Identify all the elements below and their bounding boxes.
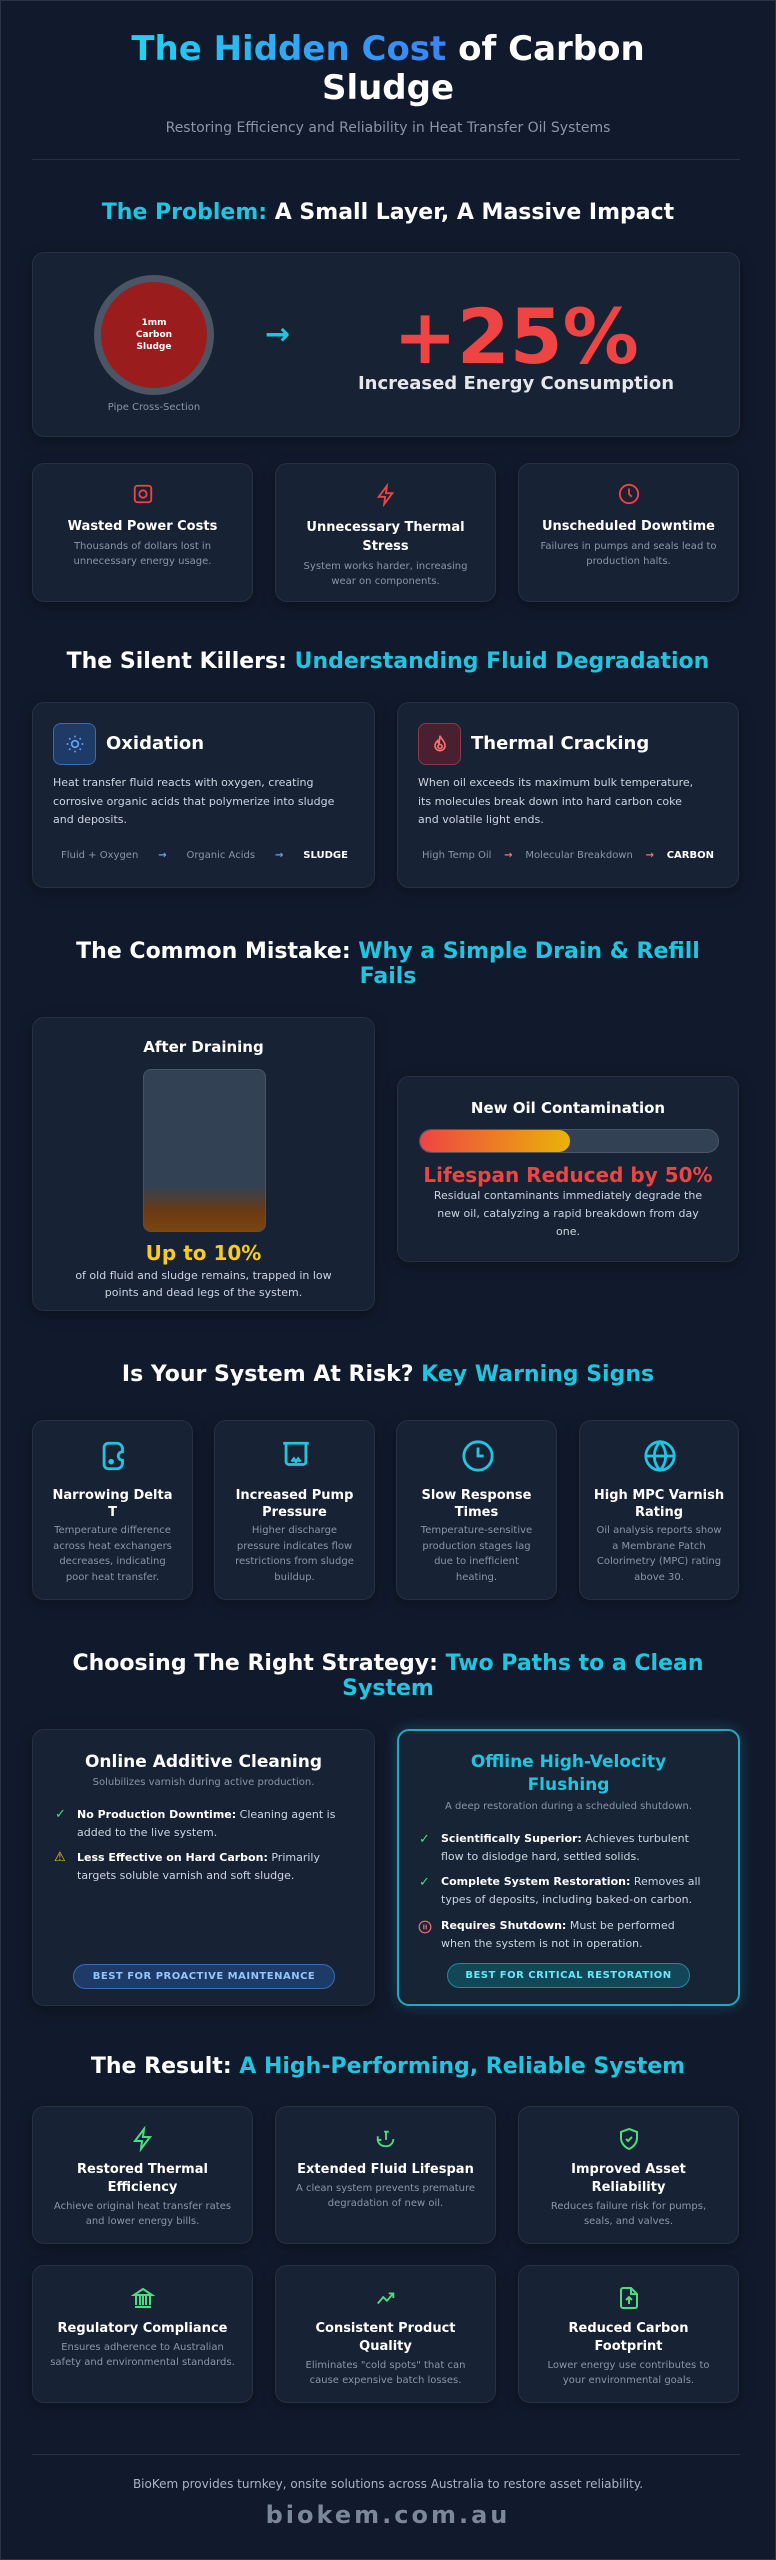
card: wasted power	[32, 463, 253, 602]
panel: online cleaning: Less Effective on Hard Carbon: Primarily	[77, 1851, 320, 1864]
card: fluid lifespan: A clean system prevents premature	[296, 2182, 475, 2194]
item: check: ✓	[419, 1832, 430, 1847]
panel: offline flushing: types of deposits, including baked-on carbon.	[441, 1893, 692, 1906]
panel: after draining: Up to 10%	[146, 1241, 261, 1265]
panel: offline flushing: A deep restoration during a scheduled shutdown.	[445, 1801, 692, 1812]
panel: after draining: After Draining	[143, 1038, 264, 1056]
panel: online cleaning: No Production Downtime: Cleaning agent is	[77, 1808, 335, 1821]
card: thermal stress: wear on components.	[331, 576, 440, 586]
icon: pipe cross-section: 1mm	[141, 318, 167, 328]
card: carbon footprint	[518, 2265, 739, 2403]
card: slow response: Times	[455, 1504, 498, 1520]
card: compliance	[32, 2265, 253, 2403]
panel: thermal cracking: Thermal Cracking	[471, 733, 649, 754]
card: thermal stress: Unnecessary Thermal	[306, 520, 465, 534]
card: MPC rating: Colorimetry (MPC) rating	[597, 1556, 721, 1567]
panel: thermal cracking	[397, 702, 739, 888]
card: compliance: Ensures adherence to Australian	[61, 2342, 224, 2352]
panel: thermal cracking: and volatile light ends.	[418, 813, 544, 826]
subtitle: Restoring Efficiency and Reliability in Heat Transfer Oil Systems	[166, 120, 610, 136]
flow: oxidation: Fluid + Oxygen	[61, 850, 138, 861]
card: product quality: cause expensive batch losses.	[310, 2374, 461, 2386]
card: product quality: Quality	[359, 2339, 412, 2354]
flow: cracking: →	[646, 850, 654, 861]
card: downtime: production halts.	[586, 556, 671, 566]
card: slow response: production stages lag	[422, 1540, 531, 1552]
card: thermal efficiency: Restored Thermal	[77, 2162, 208, 2177]
card: downtime: Failures in pumps and seals lead to	[540, 540, 717, 552]
card: product quality: Eliminates "cold spots" that can	[306, 2360, 465, 2370]
card: asset reliability: Improved Asset	[571, 2162, 686, 2177]
tank graphic	[143, 1069, 266, 1232]
panel: online cleaning	[32, 1729, 375, 2006]
item: stop	[418, 1920, 432, 1934]
heading: strategy	[72, 1651, 704, 1701]
panel: offline flushing: Flushing	[528, 1775, 609, 1795]
flow: oxidation: SLUDGE	[303, 850, 348, 861]
card: wasted power: unnecessary energy usage.	[74, 556, 211, 566]
flow: cracking: →	[504, 850, 513, 861]
panel: offline flushing: Scientifically Superior: Achieves turbulent	[441, 1832, 689, 1845]
panel: oxidation: Oxidation	[106, 733, 204, 754]
icon: globe	[644, 1440, 676, 1472]
card: pump pressure: restrictions from sludge	[235, 1556, 354, 1567]
card: carbon footprint: Footprint	[594, 2339, 663, 2354]
card: delta T: Temperature difference	[54, 1525, 171, 1536]
card: asset reliability: Reduces failure risk for pumps,	[551, 2200, 706, 2212]
card: product quality: Consistent Product	[315, 2321, 456, 2336]
panel: offline flushing: when the system is not in operation.	[441, 1937, 643, 1950]
card: downtime	[518, 463, 739, 602]
arrow: →	[265, 317, 290, 352]
card: delta T: across heat exchangers	[53, 1540, 172, 1552]
panel: oxidation: and deposits.	[53, 813, 127, 826]
card: asset reliability: seals, and valves.	[584, 2216, 673, 2226]
card: MPC rating: Oil analysis reports show	[596, 1525, 722, 1536]
card: MPC rating	[579, 1420, 739, 1600]
card: thermal stress	[275, 463, 496, 602]
card: fluid lifespan	[275, 2106, 496, 2244]
panel: oxidation: Heat transfer fluid reacts with oxygen, creating	[53, 776, 313, 789]
panel: offline flushing	[397, 1729, 740, 2006]
heading: result: The Result: A High-Performing, Reliable System	[91, 2054, 685, 2079]
card: product quality	[275, 2265, 496, 2403]
panel: offline flushing: Requires Shutdown: Must be performed	[441, 1919, 675, 1932]
card: asset reliability: Reliability	[592, 2180, 665, 2195]
panel: new oil contamination	[397, 1076, 739, 1262]
icon: sun	[53, 723, 96, 765]
flow: oxidation: Organic Acids	[186, 850, 255, 861]
title: The Hidden Cost of Carbon	[131, 29, 645, 69]
card: delta T: decreases, indicating	[59, 1556, 166, 1567]
card: delta T: Narrowing Delta	[52, 1488, 172, 1502]
badge: BEST FOR PROACTIVE MAINTENANCE	[93, 1971, 315, 1982]
panel: thermal cracking: When oil exceeds its maximum bulk temperature,	[418, 776, 693, 789]
heading: strategy: System	[342, 1676, 434, 1701]
caption: Pipe Cross-Section	[108, 402, 200, 413]
card: thermal stress: System works harder, increasing	[304, 560, 467, 572]
card: thermal efficiency	[32, 2106, 253, 2244]
icon: bolt	[133, 2126, 152, 2152]
stat label: Increased Energy Consumption	[358, 373, 674, 394]
item: check: ✓	[419, 1875, 430, 1890]
card: MPC rating: High MPC Varnish	[594, 1488, 724, 1502]
icon: pipe cross-section	[94, 275, 214, 395]
heading: common mistake: The Common Mistake: Why a Simple Drain & Refill	[76, 939, 700, 964]
icon: thermometer	[102, 1442, 124, 1470]
card: wasted power: Thousands of dollars lost in	[74, 540, 211, 552]
card: thermal efficiency: Efficiency	[108, 2180, 177, 2195]
heading: strategy: Choosing The Right Strategy: Two Paths to a Clean	[72, 1651, 704, 1676]
heading: silent killers: The Silent Killers: Understanding Fluid Degradation	[67, 649, 709, 674]
icon: trend	[377, 2292, 394, 2304]
panel: new oil contamination: Residual contaminants immediately degrade the	[434, 1189, 702, 1202]
card: thermal stress: Stress	[362, 538, 409, 554]
card: asset reliability	[518, 2106, 739, 2244]
panel: problem impact	[32, 252, 740, 437]
icon: bolt	[376, 483, 394, 507]
item: check: ✓	[55, 1807, 66, 1822]
panel: new oil contamination: one.	[556, 1225, 580, 1238]
card: slow response: heating.	[456, 1572, 497, 1582]
card: slow response: Slow Response	[422, 1488, 531, 1502]
card: slow response	[396, 1420, 557, 1600]
badge	[447, 1963, 690, 1988]
card: fluid lifespan: degradation of new oil.	[328, 2198, 443, 2208]
panel: offline flushing: Offline High-Velocity	[471, 1752, 666, 1772]
card: pump pressure: Pressure	[262, 1504, 327, 1520]
icon: file upload	[620, 2287, 638, 2309]
card: pump pressure	[214, 1420, 375, 1600]
item: warning: ⚠	[54, 1850, 66, 1865]
icon: flame	[418, 723, 461, 765]
panel: after draining	[32, 1017, 375, 1311]
flow: cracking: High Temp Oil	[422, 850, 491, 861]
panel: oxidation: corrosive organic acids that polymerize into sludge	[53, 794, 334, 808]
heading: common mistake: Fails	[360, 964, 416, 989]
icon: pump	[283, 1442, 309, 1466]
card: thermal efficiency: and lower energy bills.	[86, 2216, 199, 2226]
progress bar	[419, 1129, 719, 1153]
panel: offline flushing: Complete System Restoration: Removes all	[441, 1875, 701, 1888]
panel: after draining: points and dead legs of the system.	[105, 1286, 302, 1299]
title: Sludge	[322, 68, 454, 108]
panel: oxidation	[32, 702, 375, 888]
card: carbon footprint: Lower energy use contributes to	[548, 2360, 710, 2370]
card: delta T	[32, 1420, 193, 1600]
card: thermal efficiency: Achieve original heat transfer rates	[54, 2200, 231, 2212]
heading: common mistake	[76, 939, 700, 989]
card: carbon footprint: Reduced Carbon	[569, 2321, 688, 2336]
card: delta T: poor heat transfer.	[66, 1572, 159, 1582]
panel: offline flushing: flow to dislodge hard, settled solids.	[441, 1850, 640, 1863]
card: MPC rating: Rating	[635, 1504, 683, 1520]
flow: oxidation: →	[158, 850, 167, 861]
card: slow response: due to inefficient	[434, 1556, 519, 1567]
panel: thermal cracking: its molecules break down into hard carbon coke	[418, 794, 682, 808]
flow: cracking	[422, 850, 714, 861]
card: downtime: Unscheduled Downtime	[542, 519, 715, 534]
card: MPC rating: above 30.	[634, 1572, 684, 1582]
card: pump pressure: Increased Pump	[236, 1488, 353, 1502]
icon: clock	[618, 484, 640, 504]
card: compliance: Regulatory Compliance	[58, 2321, 227, 2336]
card: pump pressure: Higher discharge	[252, 1525, 337, 1536]
stat: +25%: +25%	[393, 292, 639, 381]
card: carbon footprint: your environmental goals.	[563, 2374, 694, 2386]
card: slow response: Temperature-sensitive	[421, 1525, 532, 1536]
icon: pipe cross-section: Sludge	[137, 342, 171, 352]
icon: pipe cross-section: Carbon	[136, 330, 172, 340]
flow: oxidation	[61, 850, 348, 861]
flow: cracking: CARBON	[667, 850, 714, 861]
card: delta T: T	[108, 1504, 117, 1520]
panel: new oil contamination: New Oil Contamination	[471, 1099, 665, 1117]
panel: online cleaning: added to the live system.	[77, 1826, 217, 1839]
card: pump pressure: pressure indicates flow	[237, 1540, 352, 1552]
icon: shield	[620, 2128, 638, 2150]
card: compliance: safety and environmental standards.	[50, 2356, 235, 2368]
footer url: biokem.com.au	[266, 2501, 510, 2529]
flow: oxidation: →	[275, 850, 283, 861]
flow: cracking: Molecular Breakdown	[525, 850, 633, 861]
badge	[73, 1964, 335, 1989]
title	[131, 29, 645, 108]
panel: online cleaning: Online Additive Cleaning	[85, 1752, 322, 1772]
heading: problem: The Problem: A Small Layer, A Massive Impact	[102, 200, 674, 225]
panel: new oil contamination: new oil, catalyzing a rapid breakdown from day	[437, 1207, 699, 1220]
icon: recycle	[376, 2130, 394, 2148]
icon: building	[131, 2288, 155, 2308]
badge: BEST FOR CRITICAL RESTORATION	[465, 1970, 672, 1981]
heading: warning signs: Is Your System At Risk? Key Warning Signs	[122, 1362, 654, 1387]
card: fluid lifespan: Extended Fluid Lifespan	[297, 2162, 474, 2177]
icon: clock	[462, 1440, 494, 1472]
card: MPC rating: a Membrane Patch	[612, 1540, 706, 1552]
panel: online cleaning: targets soluble varnish and soft sludge.	[77, 1869, 294, 1882]
card: wasted power: Wasted Power Costs	[68, 519, 217, 534]
footer text: BioKem provides turnkey, onsite solutions across Australia to restore asset reliability.	[133, 2477, 643, 2491]
panel: new oil contamination: Lifespan Reduced by 50%	[423, 1163, 713, 1187]
panel: after draining: of old fluid and sludge remains, trapped in low	[75, 1269, 332, 1282]
card: pump pressure: buildup.	[274, 1572, 315, 1582]
icon: money	[134, 484, 152, 504]
panel: online cleaning: Solubilizes varnish during active production.	[93, 1777, 314, 1788]
